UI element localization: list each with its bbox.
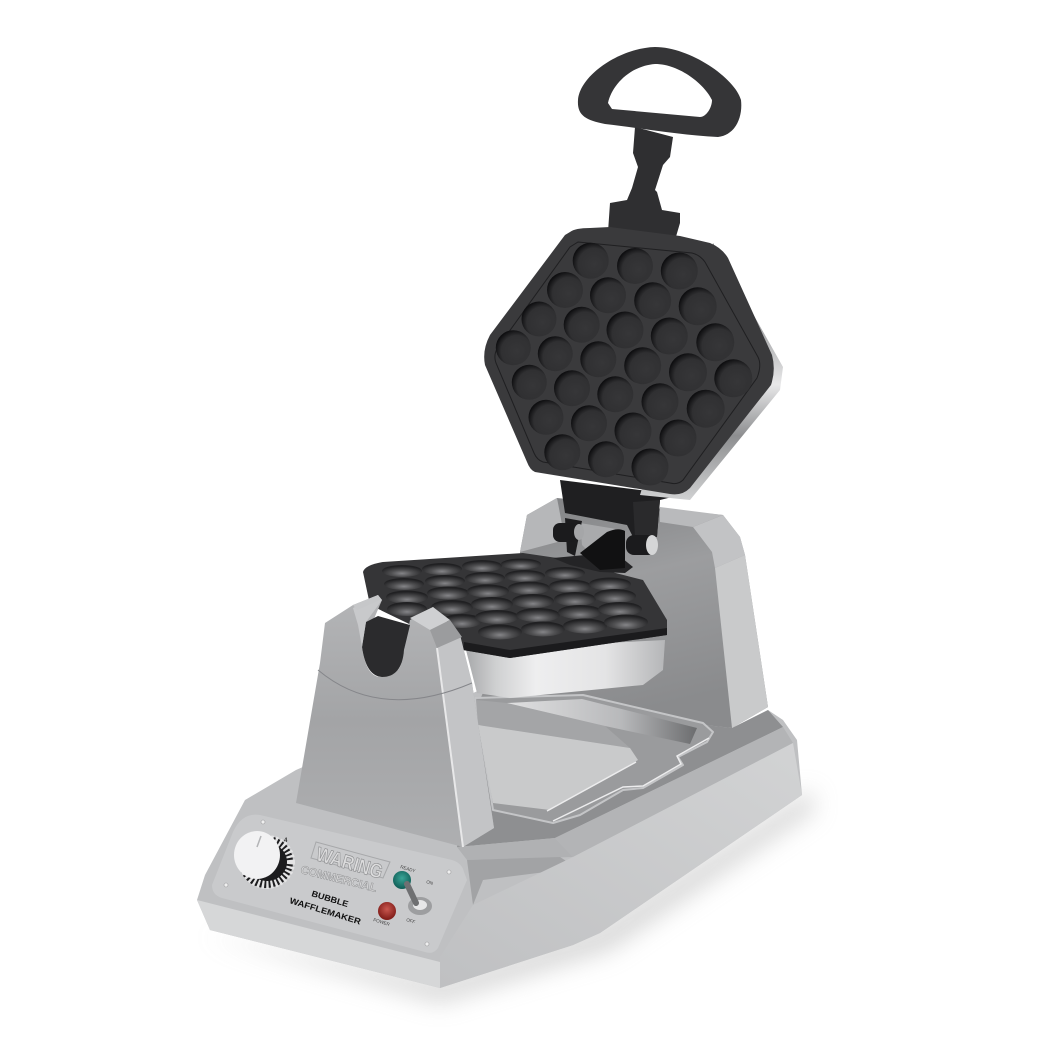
rear tower right face (715, 555, 768, 728)
right ear top facet (410, 607, 450, 630)
ready light (393, 871, 411, 889)
slot interior (362, 616, 410, 677)
right hinge pin (626, 535, 658, 555)
knurled ring (243, 839, 291, 885)
toggle switch (407, 884, 432, 915)
logo box (311, 842, 390, 878)
right ear dark facet (430, 620, 462, 648)
temperature knob (234, 831, 293, 888)
rear bracket tower (480, 498, 768, 728)
right hinge arm (633, 500, 660, 537)
lower plate wells (382, 558, 648, 640)
upper plate wells (496, 243, 752, 486)
power label: POWER (373, 917, 391, 927)
upper plate silver back (640, 243, 783, 500)
base rear facet (555, 727, 793, 857)
slot left wall (353, 595, 382, 647)
left ear cap (353, 595, 380, 610)
ready label: READY (400, 864, 416, 873)
knob top (234, 831, 280, 879)
power light (378, 902, 396, 920)
on label: ON (426, 879, 434, 886)
tray left wall (476, 700, 630, 748)
front bracket tower (296, 595, 494, 847)
panel screws (224, 820, 451, 946)
front tower side edge highlight (437, 648, 463, 847)
base lower bevel (197, 900, 440, 988)
handle grip (578, 47, 741, 137)
base housing (197, 690, 802, 988)
hinge gap metal (580, 523, 622, 553)
knob pointer (257, 836, 261, 847)
WARING logo: WARING (314, 844, 385, 884)
hinge assembly (553, 480, 680, 573)
left hinge pin (553, 523, 584, 542)
product name line 2: WAFFLEMAKER (288, 895, 362, 927)
tray inner pan (478, 725, 638, 810)
upper waffle plate (484, 227, 774, 494)
control panel plate (212, 815, 467, 953)
product name line 1: BUBBLE (310, 888, 350, 909)
base front face (440, 743, 802, 988)
hinge base plate (553, 555, 633, 573)
base dark panel surround (467, 857, 577, 905)
rear tower left shoulder (520, 498, 565, 552)
upper plate inner line (495, 242, 760, 484)
front tower side face (437, 635, 494, 847)
lower waffle plate (363, 553, 667, 658)
scale number: 4 (284, 838, 288, 844)
COMMERCIAL logo: COMMERCIAL (299, 864, 378, 895)
handle stem (608, 127, 680, 240)
lower plate edge band (463, 628, 667, 658)
cast shadow (205, 790, 815, 1003)
tray far wall (507, 699, 697, 744)
rear tower top band (660, 507, 723, 527)
rear tower crown facet (693, 515, 745, 568)
off label: OFF (406, 917, 416, 925)
cover seam (318, 670, 472, 700)
hinge cam (580, 529, 625, 570)
lower plate silver pan (466, 640, 665, 698)
drip tray (475, 695, 713, 823)
base mid facet (457, 838, 573, 860)
base floor under tray (457, 700, 783, 847)
tray rim highlight (547, 738, 709, 821)
left hinge arm (565, 518, 582, 556)
